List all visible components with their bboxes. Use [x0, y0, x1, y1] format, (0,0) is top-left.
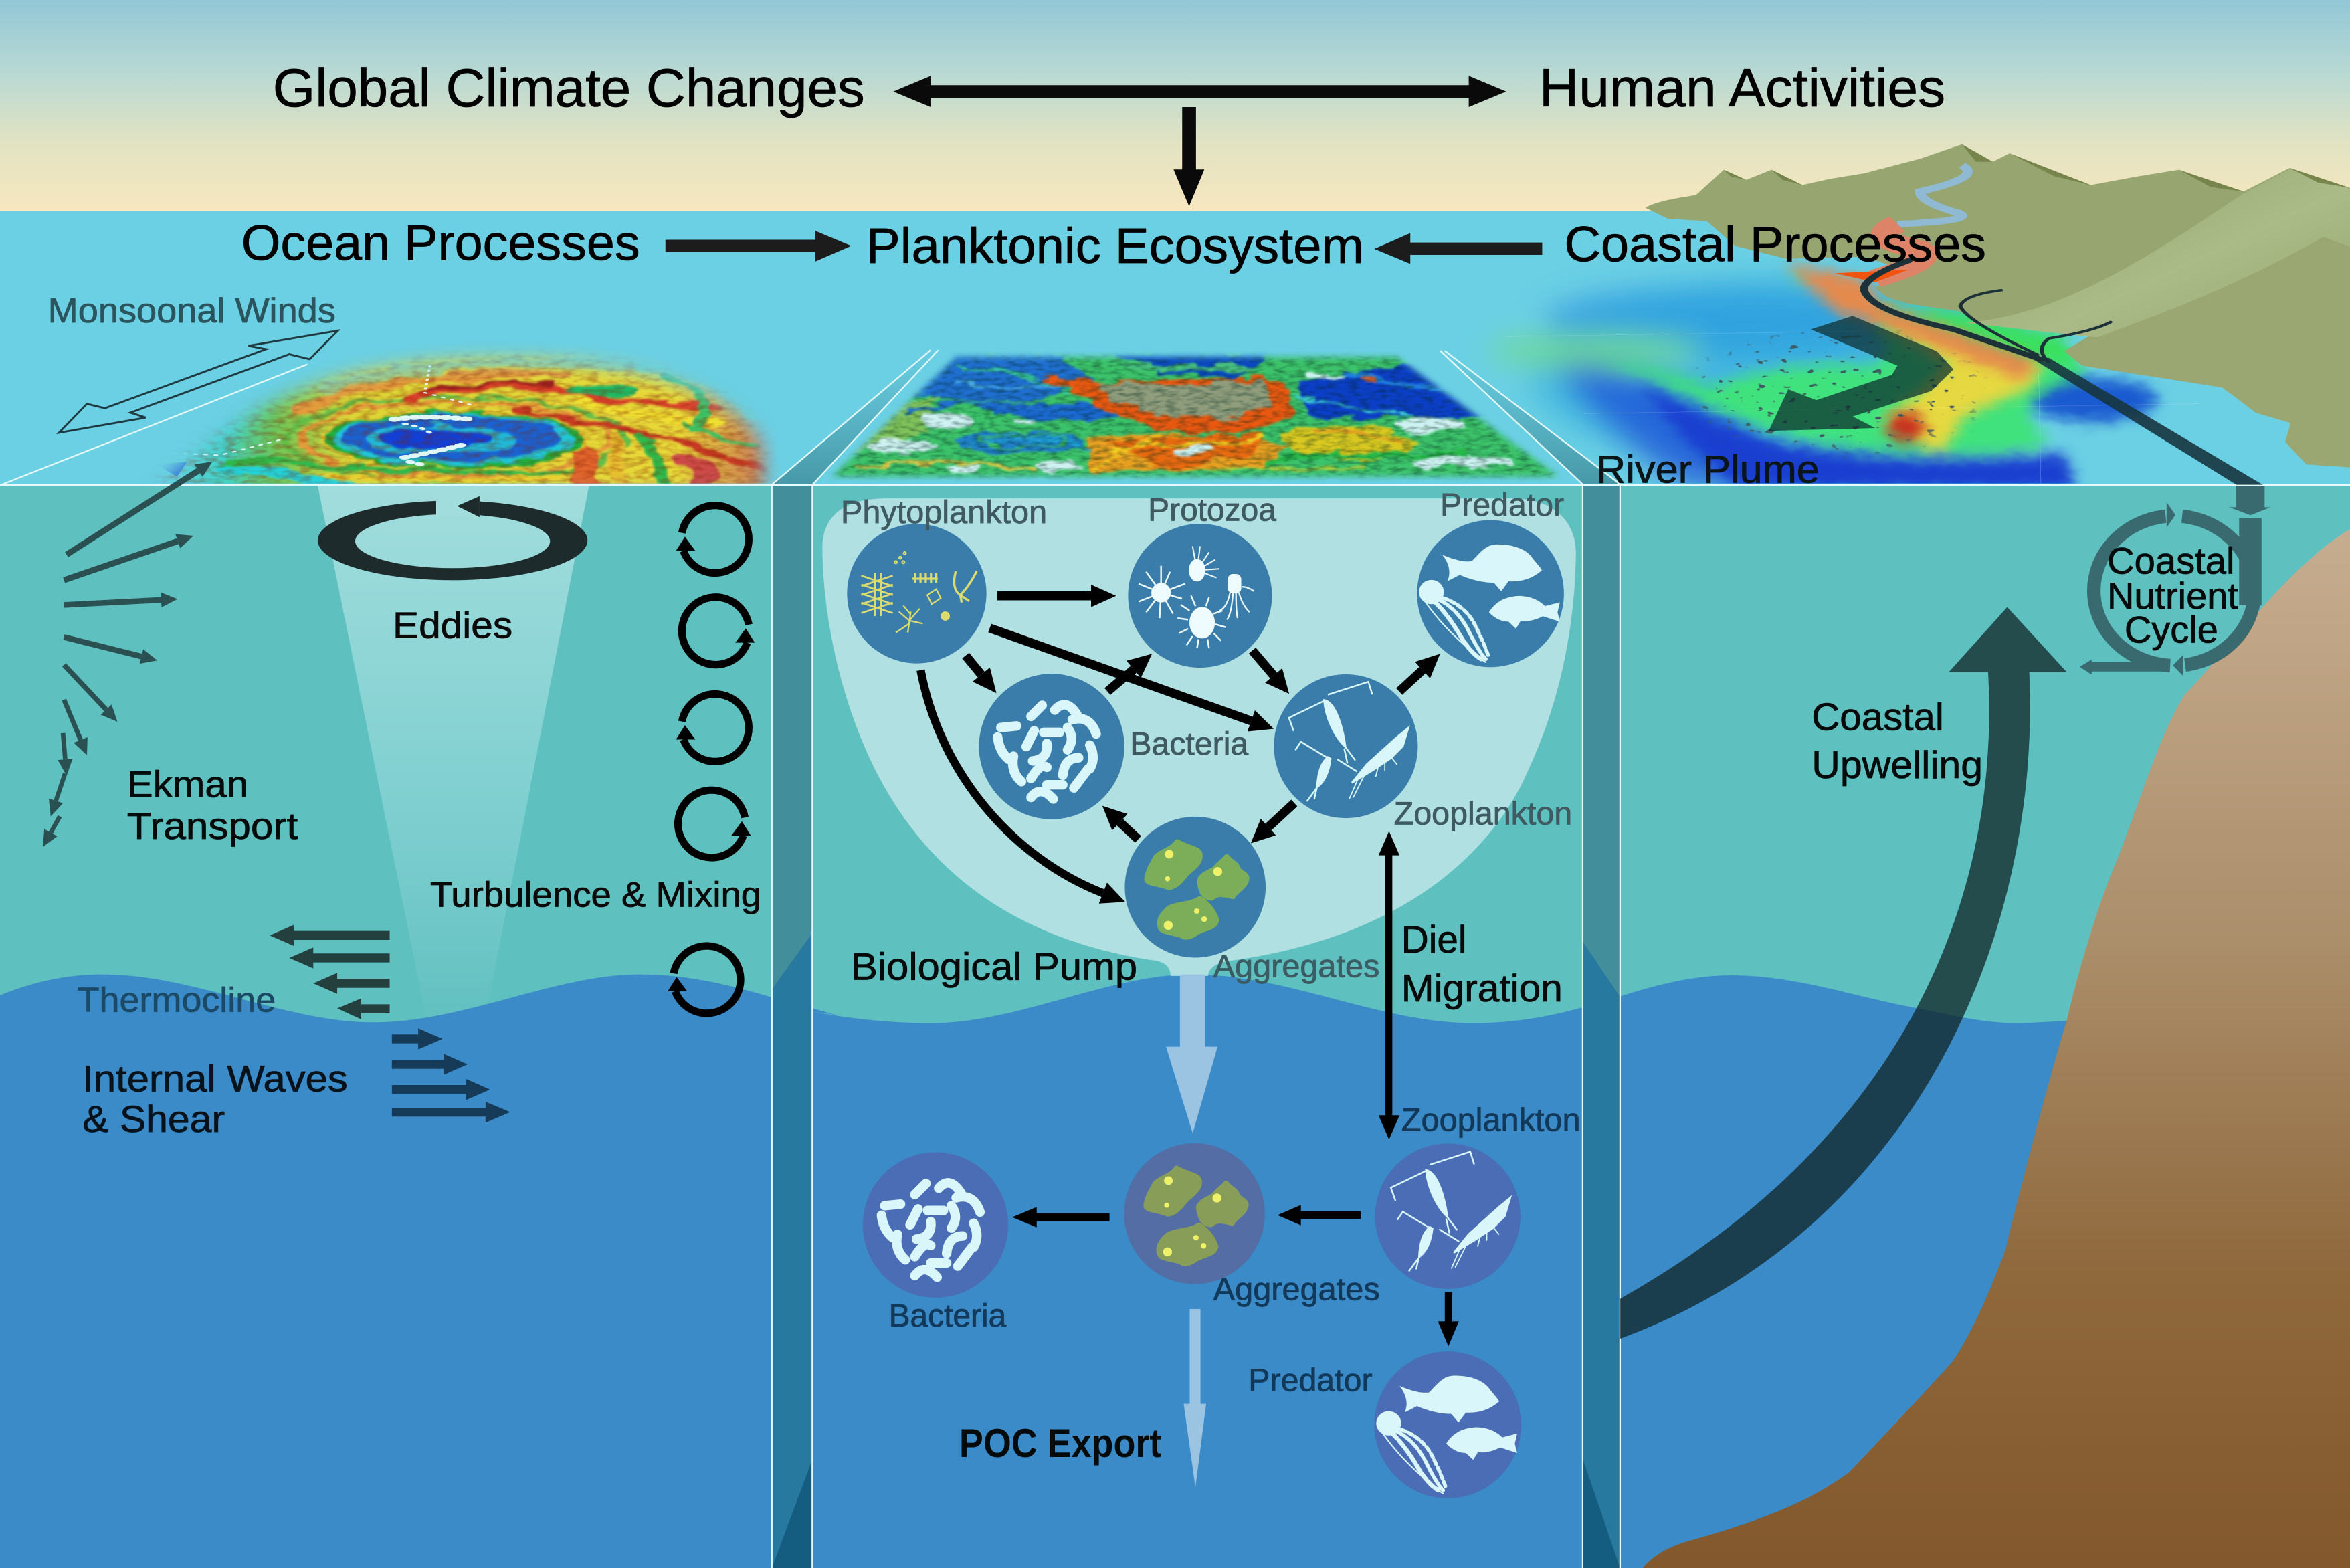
- label: monsoonal winds: Monsoonal Winds: [48, 291, 336, 330]
- river mouth: [1835, 270, 1908, 282]
- label: thermocline: Thermocline: [78, 981, 276, 1019]
- eddy clouds: [164, 366, 476, 465]
- node: bacteria lower: [863, 1153, 1008, 1298]
- node: protozoa: [1128, 524, 1272, 668]
- river branches: [1864, 260, 2111, 362]
- title: global climate changes: Global Climate Changes: [273, 58, 865, 118]
- node: predator lower: [1374, 1351, 1521, 1498]
- label: diel migration: Migration: [1401, 967, 1563, 1010]
- central satellite image: [830, 352, 1560, 482]
- node: aggregates upper: [1124, 817, 1266, 957]
- mountain ridge shadows: [1724, 144, 2350, 191]
- label: ekman transport: Transport: [127, 805, 298, 847]
- node: phytoplankton: [847, 524, 987, 664]
- label: biological pump: Biological Pump: [851, 945, 1137, 988]
- label: diel migration: [1401, 918, 1563, 1010]
- plume scan lines: [1505, 331, 2200, 485]
- arrow: monsoonal winds: [59, 330, 338, 433]
- label: diel migration: Diel: [1401, 918, 1466, 961]
- sky background: [0, 0, 2350, 211]
- food web arrows: [920, 585, 1422, 893]
- label: zooplankton lower: Zooplankton: [1401, 1102, 1581, 1138]
- coastal nutrient cycle arrows: [2080, 486, 2270, 676]
- coastal speckle: [1686, 330, 2016, 465]
- turbulence circles: [668, 506, 755, 1013]
- node: predator upper: [1417, 520, 1564, 667]
- perspective strips: [772, 350, 1620, 484]
- heading: coastal processes: Coastal Processes: [1564, 216, 1986, 272]
- node: aggregates lower: [1124, 1143, 1265, 1284]
- coastal mountains: [1646, 144, 2350, 468]
- arrows below thermocline: [392, 1028, 510, 1122]
- label: ekman transport: Ekman: [127, 763, 248, 805]
- label: bacteria lower: Bacteria: [889, 1298, 1006, 1334]
- label: internal waves and shear: Internal Waves: [82, 1057, 348, 1099]
- label: aggregates lower: Aggregates: [1213, 1272, 1380, 1308]
- label: phytoplankton: Phytoplankton: [841, 494, 1047, 530]
- coastal satellite image: river plume: [1488, 264, 2200, 491]
- arrow: climate and human activities: [893, 76, 1506, 107]
- perspective and edge lines: [0, 350, 2350, 1568]
- arrow: coastal upwelling: [1620, 607, 2067, 1339]
- eddy ring arrow: [318, 495, 587, 580]
- lower food web arrows: [1012, 1205, 1459, 1346]
- heading: planktonic ecosystem: Planktonic Ecosystem: [866, 218, 1364, 274]
- node: zooplankton lower: [1375, 1143, 1521, 1289]
- arrows above thermocline: [270, 925, 390, 1019]
- left side wall of central column: [772, 484, 812, 1568]
- heading: ocean processes: Ocean Processes: [241, 215, 640, 271]
- label: aggregates upper: Aggregates: [1213, 949, 1379, 985]
- sea surface: [0, 211, 2350, 486]
- label: coastal upwelling: [1812, 696, 1983, 787]
- right side wall of central column: [1583, 484, 1620, 1568]
- label: river plume: River Plume: [1596, 448, 1820, 492]
- eddy satellite image: [152, 345, 777, 484]
- label: coastal nutrient cycle: Coastal: [2107, 540, 2234, 582]
- label: coastal nutrient cycle: Nutrient: [2107, 575, 2238, 617]
- label: internal waves and shear: & Shear: [82, 1098, 225, 1140]
- eddy left fragment: [163, 462, 187, 476]
- node: bacteria upper: [979, 674, 1124, 819]
- node: zooplankton upper: [1274, 674, 1417, 818]
- arrow: ocean to ecosystem: [666, 231, 852, 262]
- coastal land and seabed: [1643, 529, 2350, 1568]
- arrow: poc export: [1183, 1309, 1206, 1488]
- label: internal waves and shear: [82, 1057, 348, 1140]
- label: zooplankton upper: Zooplankton: [1394, 796, 1572, 832]
- river sediment: [1875, 224, 1923, 278]
- label: predator lower: Predator: [1248, 1363, 1373, 1399]
- upper water layer: [0, 484, 2350, 1568]
- arrow: biological pump: [1166, 975, 1217, 1133]
- middle mountain slope: [1965, 169, 2350, 351]
- label: poc export: POC Export: [959, 1420, 1161, 1466]
- front mountain slope: [2066, 237, 2350, 468]
- plume flow arrow: [1769, 316, 2263, 485]
- river upstream: [1898, 165, 1968, 224]
- title: human activities: Human Activities: [1539, 58, 1945, 118]
- arrow: diel migration: [1379, 831, 1399, 1140]
- label: ekman transport: [127, 763, 298, 847]
- ekman spiral arrows: [51, 470, 199, 833]
- back mountain range: [1646, 144, 2350, 468]
- label: coastal upwelling: Upwelling: [1812, 744, 1983, 787]
- river channel to shelf: [2032, 358, 2263, 485]
- label: bacteria upper: Bacteria: [1130, 726, 1248, 762]
- label: protozoa: Protozoa: [1148, 492, 1276, 528]
- arrow: coastal to ecosystem: [1374, 233, 1542, 264]
- label: turbulence and mixing: Turbulence & Mixing: [430, 876, 761, 915]
- deep water with thermocline: [0, 975, 2098, 1568]
- label: eddies: Eddies: [393, 605, 512, 646]
- light beam below eddy: [318, 486, 589, 1022]
- label: predator upper: Predator: [1440, 487, 1564, 523]
- label: coastal nutrient cycle: [2107, 540, 2238, 651]
- arrow: down to ecosystem: [1173, 107, 1204, 206]
- food web bowl: [822, 498, 1576, 976]
- label: coastal nutrient cycle: Cycle: [2125, 609, 2218, 651]
- label: coastal upwelling: Coastal: [1812, 696, 1944, 739]
